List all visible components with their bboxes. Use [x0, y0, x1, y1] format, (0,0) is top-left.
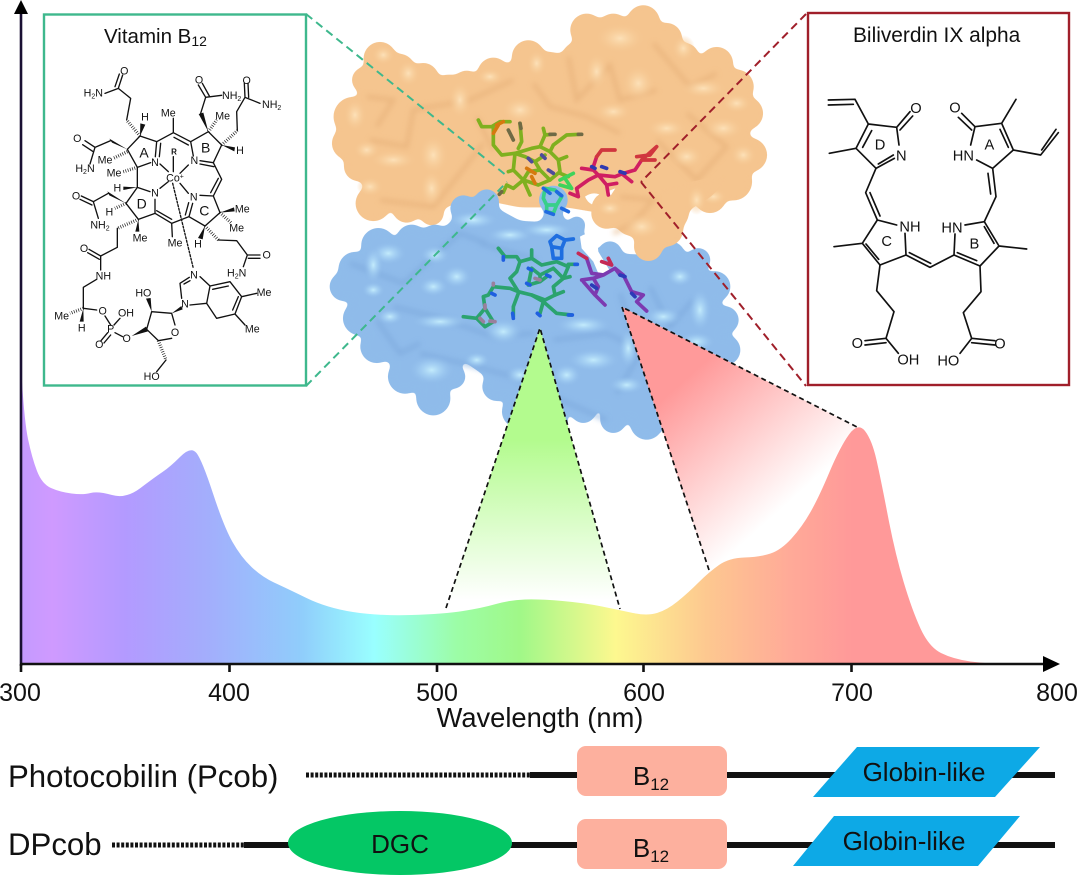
- structure: vitamin B12: NH: [222, 90, 237, 102]
- structure: vitamin B12: O: [195, 74, 203, 86]
- structure: vitamin B12: H: [227, 268, 235, 280]
- structure: vitamin B12: H: [141, 112, 149, 124]
- structure: biliverdin: O: [852, 336, 863, 352]
- structure: vitamin B12: HO: [135, 288, 151, 300]
- structure: vitamin B12: H: [78, 323, 86, 335]
- structure: vitamin B12: NH: [262, 99, 277, 111]
- domain row: Photocobilin (Pcob): [8, 746, 1055, 797]
- structure: vitamin B12: O: [95, 339, 103, 351]
- structure: vitamin B12: N: [95, 88, 103, 100]
- domain: Globin-like: [793, 816, 1020, 866]
- domain: B12: B: [633, 833, 650, 863]
- structure: vitamin B12: N: [190, 155, 198, 167]
- structure: vitamin B12: [54, 65, 281, 383]
- structure: biliverdin: O: [910, 101, 922, 117]
- ligand: biliverdin upper: [570, 147, 657, 197]
- domain: Globin-like: Globin-like: [843, 826, 965, 856]
- structure: vitamin B12: H: [194, 238, 202, 250]
- structure: biliverdin: O: [994, 337, 1006, 353]
- structure: biliverdin: HN: [941, 221, 963, 237]
- structure: biliverdin: [828, 99, 1058, 369]
- axis tick labels: 500: [416, 679, 458, 707]
- structure: vitamin B12: 2: [235, 274, 239, 281]
- structure: biliverdin: O: [949, 101, 961, 117]
- structure: biliverdin: A: [984, 137, 994, 153]
- structure: vitamin B12: 2: [91, 94, 95, 101]
- ligand: B12 upper chain: [478, 120, 582, 195]
- structure: vitamin B12: O: [120, 65, 128, 77]
- orange protein surface: [332, 6, 767, 225]
- domain: DGC: [288, 811, 512, 875]
- ligand: adenine upper: [543, 188, 568, 214]
- axis tick labels: 800: [1036, 679, 1078, 707]
- domain: B12: 12: [650, 775, 669, 794]
- domain: B12: B: [633, 761, 650, 791]
- red zoom lines: [641, 14, 806, 386]
- structure: biliverdin: HO: [937, 353, 959, 369]
- label: DPcob: DPcob: [8, 827, 102, 862]
- axis tick labels: 700: [831, 679, 873, 707]
- domain row: DPcob: [8, 811, 1055, 875]
- structure: vitamin B12: O: [123, 333, 131, 345]
- protein structure: [330, 6, 767, 439]
- structure: vitamin B12: N: [190, 192, 198, 204]
- structure: vitamin B12: H: [75, 163, 83, 175]
- structure: vitamin B12: N: [151, 187, 159, 199]
- structure: vitamin B12: HO: [144, 371, 160, 383]
- structure: vitamin B12: N: [239, 268, 246, 280]
- heading: Biliverdin IX alpha: Biliverdin IX alpha: [853, 24, 1021, 47]
- white gaps between chains: [580, 188, 615, 274]
- structure: biliverdin: B: [969, 237, 979, 253]
- structure: vitamin B12: 2: [237, 96, 241, 103]
- structure: vitamin B12: N: [151, 157, 159, 169]
- structure: vitamin B12: 2: [106, 225, 110, 232]
- structure: vitamin B12: O: [263, 250, 271, 262]
- domain: DGC: DGC: [371, 829, 429, 859]
- structure: vitamin B12: 2: [277, 105, 281, 112]
- structure: vitamin B12: H: [113, 182, 121, 194]
- structure: vitamin B12: Me: [107, 167, 121, 179]
- domain: Globin-like: [813, 747, 1040, 797]
- structure: vitamin B12: O: [243, 75, 251, 87]
- domain: B12: [577, 746, 727, 796]
- structure: vitamin B12: Me: [245, 324, 260, 336]
- structure: vitamin B12: H: [105, 207, 113, 219]
- label: Photocobilin: Photocobilin (Pcob): [8, 759, 278, 794]
- structure: vitamin B12: O: [80, 243, 88, 255]
- structure: vitamin B12: Me: [161, 108, 176, 120]
- structure: vitamin B12: R: [171, 148, 177, 157]
- axis tick labels: 600: [623, 679, 665, 707]
- ligand: adenine lower: [550, 236, 573, 258]
- structure: vitamin B12: D: [137, 195, 147, 211]
- structure: vitamin B12: O: [171, 327, 179, 339]
- structure: vitamin B12: H: [84, 88, 91, 100]
- structure: vitamin B12: N: [190, 269, 198, 281]
- structure: vitamin B12: NH: [90, 219, 106, 231]
- structure: biliverdin: D: [875, 137, 885, 153]
- structure: vitamin B12: Me: [235, 204, 250, 216]
- domain: B12: [577, 819, 727, 869]
- domain: Globin-like: Globin-like: [863, 757, 985, 787]
- axis tick labels: 300: [0, 679, 41, 707]
- structure: vitamin B12: O: [73, 133, 81, 145]
- structure: vitamin B12: NH: [96, 270, 111, 282]
- structure: vitamin B12: P: [107, 324, 114, 336]
- heading: Vitamin B12: Vitamin B: [104, 25, 191, 48]
- panel: Biliverdin IX alpha: [808, 13, 1069, 385]
- axis tick labels: 400: [208, 679, 250, 707]
- domain: B12: 12: [650, 847, 669, 866]
- orange lower-right lobe: [592, 173, 733, 261]
- structure: vitamin B12: Me: [54, 310, 69, 322]
- structure: vitamin B12: OH: [118, 308, 134, 320]
- green light cone: [446, 328, 620, 609]
- structure: vitamin B12: Co: [166, 172, 180, 184]
- ligand: B12 lower chain: [463, 248, 577, 327]
- structure: vitamin B12: O: [99, 305, 107, 317]
- heading: Vitamin B12: 12: [191, 33, 207, 49]
- chart axes: [14, 0, 1060, 672]
- structure: vitamin B12: A: [139, 145, 149, 161]
- blue protein surface: [330, 186, 740, 439]
- structure: biliverdin: NH: [899, 219, 921, 235]
- structure: vitamin B12: H: [236, 145, 244, 157]
- ligands: [463, 120, 657, 327]
- axis title: Wavelength (nm): [437, 702, 643, 733]
- structure: vitamin B12: Me: [215, 111, 230, 123]
- structure: vitamin B12: C: [199, 203, 209, 219]
- spectrum area: [21, 365, 1020, 664]
- structure: vitamin B12: Me: [229, 222, 244, 234]
- ligand: biliverdin lower: [578, 253, 647, 311]
- structure: biliverdin: N: [896, 148, 907, 164]
- structure: biliverdin: HN: [953, 148, 974, 164]
- structure: vitamin B12: O: [72, 191, 80, 203]
- structure: vitamin B12: B: [201, 139, 210, 155]
- structure: vitamin B12: Me: [133, 233, 147, 245]
- structure: biliverdin: C: [881, 234, 892, 250]
- structure: vitamin B12: Me: [257, 287, 271, 299]
- structure: biliverdin: OH: [897, 353, 919, 369]
- structure: vitamin B12: 2: [83, 169, 87, 176]
- structure: vitamin B12: N: [181, 298, 189, 310]
- green zoom lines: [306, 14, 507, 386]
- red light cone: [622, 307, 857, 572]
- structure: vitamin B12: +: [180, 174, 184, 181]
- structure: vitamin B12: N: [87, 163, 95, 175]
- structure: vitamin B12: Me: [168, 238, 182, 250]
- structure: vitamin B12: Me: [98, 154, 112, 166]
- panel: Vitamin B12: [44, 14, 306, 386]
- axis tick labels: [0, 679, 1078, 707]
